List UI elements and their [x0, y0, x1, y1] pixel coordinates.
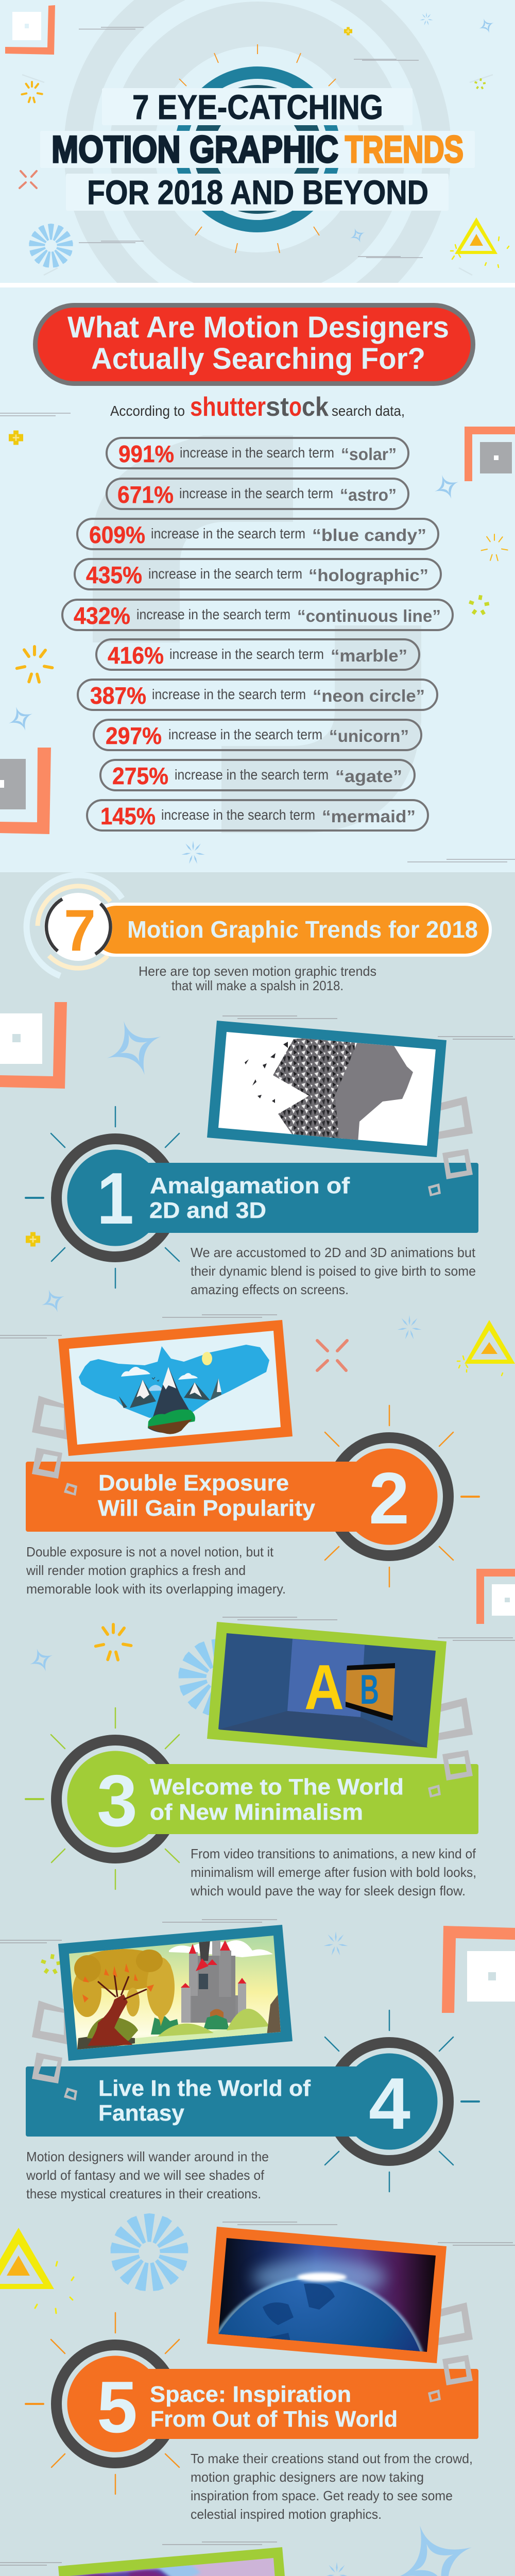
faint large letter backdrop — [93, 435, 421, 833]
search term row: marble: increase in the search term — [169, 646, 324, 662]
decorative lines — [222, 1617, 515, 1640]
icon: blue asterisk — [420, 12, 433, 26]
icon: yellow triangle — [451, 217, 509, 267]
outer light arc — [27, 875, 122, 976]
icon: yellow ticks — [96, 1624, 131, 1660]
grey squares — [32, 1448, 77, 1496]
search term row: neon circle: 387% — [90, 682, 146, 709]
icon: orange frame right — [476, 1569, 515, 1624]
search term row: astro: increase in the search term — [179, 485, 333, 501]
icon: blue star lower — [350, 228, 365, 243]
description: amazing effects on screens. — [191, 1282, 349, 1297]
icon: blue asterisk — [324, 2562, 349, 2576]
description — [26, 1544, 286, 1597]
orange title banner: Motion Graphic Trends for 2018 — [127, 916, 478, 943]
title bar — [26, 2066, 357, 2137]
icon: yellow cross — [344, 27, 352, 35]
cream arcs — [38, 886, 110, 968]
page background: light blue upper section — [0, 0, 515, 872]
description — [190, 1846, 476, 1899]
source line with shutterstock wordmark: o — [289, 392, 302, 422]
search term row: astro: 671% — [117, 481, 174, 508]
number: 3 — [97, 1760, 138, 1842]
big grey square behind photo — [436, 1698, 473, 1740]
description — [26, 2149, 269, 2201]
title bar: Welcome to The World — [150, 1774, 404, 1800]
source line with shutterstock wordmark — [110, 392, 405, 422]
icon: yellow triangle — [457, 1320, 515, 1376]
source line with shutterstock wordmark: search data, — [332, 403, 405, 419]
search term row: continuous line: 432% — [74, 602, 130, 629]
icon: big blue star — [397, 2526, 472, 2576]
source line with shutterstock wordmark: st — [266, 392, 289, 422]
icon: blue sunburst — [110, 2213, 189, 2292]
search term row: unicorn: increase in the search term — [168, 726, 322, 742]
panel: trend 1 — [0, 1002, 515, 1312]
number ring — [57, 1139, 174, 1257]
orange title banner — [88, 903, 492, 957]
search term row: neon circle — [78, 680, 437, 710]
number ring — [331, 2042, 448, 2161]
icon: yellow triangle — [0, 2228, 74, 2313]
icon: grey square and orange frame left — [0, 748, 51, 834]
description: inspiration from space. Get ready to see some — [191, 2488, 453, 2503]
search term row: mermaid — [87, 800, 428, 831]
search term row: unicorn: “unicorn” — [329, 726, 409, 745]
search term row: continuous line: “continuous line” — [297, 606, 441, 625]
page background: grey-blue trends section — [0, 872, 515, 2576]
search term row: blue candy: “blue candy” — [312, 526, 426, 545]
grey squares — [428, 2355, 473, 2402]
search term row: blue candy: 609% — [89, 521, 145, 548]
search term row: mermaid: 145% — [100, 803, 156, 829]
description: will render motion graphics a fresh and — [26, 1563, 246, 1578]
title bar — [26, 1462, 357, 1532]
icon: blue asterisk — [397, 1315, 422, 1340]
description: world of fantasy and we will see shades of — [26, 2167, 265, 2183]
search term row: marble — [96, 639, 419, 670]
numeral badge: 7 — [64, 898, 96, 963]
photo frame: fluid ink — [58, 2547, 293, 2576]
icon: green dots behind photo — [41, 1954, 61, 1974]
title bar — [148, 1163, 478, 1233]
search term row: marble: 416% — [108, 642, 164, 669]
photo frame: minimal AB room: A — [304, 1652, 344, 1723]
panel: trend 5 — [0, 2213, 515, 2522]
icon: blue sunburst behind photo — [178, 1639, 256, 1716]
search term row: holographic: “holographic” — [308, 566, 428, 585]
search term row: holographic: 435% — [86, 562, 142, 588]
icon: orange corner frame — [5, 5, 55, 55]
panel: trend 3 — [26, 1569, 515, 1899]
red heading pill: What Are Motion Designers — [67, 311, 449, 344]
icon: orange frame with white square — [0, 1002, 67, 1089]
search term row: unicorn: 297% — [106, 722, 162, 749]
search term row: marble: “marble” — [331, 646, 407, 665]
title bar: Space: Inspiration — [150, 2382, 351, 2407]
intro paragraph — [139, 963, 376, 993]
title bar: Amalgamation of — [150, 1173, 350, 1198]
title box line 3: FOR 2018 AND BEYOND — [87, 173, 428, 211]
number ring — [331, 1437, 448, 1556]
description: these mystical creatures in their creations. — [26, 2186, 261, 2201]
icon: yellow cross — [26, 1232, 40, 1247]
panel: search data — [0, 305, 515, 864]
red heading pill: Actually Searching For? — [91, 342, 425, 376]
photo frame: minimal AB room: B — [360, 1667, 379, 1713]
icon: blue star lower — [42, 1290, 64, 1312]
search term row: solar: “solar” — [341, 445, 397, 464]
search term row: continuous line: increase in the search term — [136, 606, 290, 622]
icon: blue star — [30, 1649, 53, 1671]
red heading pill — [35, 305, 473, 383]
search term row: mermaid: “mermaid” — [322, 807, 416, 826]
decorative lines — [0, 1315, 277, 1338]
search term row: agate: 275% — [112, 762, 168, 789]
search term row: continuous line — [62, 600, 453, 630]
icon: blue star — [107, 1021, 161, 1075]
decorative lines — [0, 1920, 277, 1943]
rays — [51, 2313, 179, 2494]
search term row: agate: “agate” — [335, 767, 402, 786]
title box line 2: TRENDS — [345, 129, 464, 171]
search term row: unicorn — [94, 720, 421, 750]
big grey square behind photo — [436, 2302, 473, 2345]
description: celestial inspired motion graphics. — [191, 2506, 382, 2522]
title bar: Live In the World of — [98, 2076, 311, 2101]
title bar: Double Exposure — [98, 1470, 289, 1496]
search term row: agate: increase in the search term — [175, 767, 329, 783]
big grey square behind photo — [32, 1396, 70, 1440]
icon: green dots — [474, 78, 486, 89]
icon: green dots — [469, 595, 489, 615]
title bar: Fantasy — [98, 2100, 185, 2126]
search term row: holographic: increase in the search term — [148, 566, 302, 582]
photo frame: fantasy castle — [58, 1925, 293, 2061]
decorative lines — [0, 2542, 277, 2565]
decorative lines — [222, 1016, 515, 1039]
title bar: From Out of This World — [150, 2406, 398, 2432]
icon: blue star — [435, 475, 458, 499]
big grey square behind photo — [32, 2001, 70, 2045]
icon: thin yellow ticks — [482, 534, 508, 561]
photo frame: shattered head — [206, 1021, 448, 1158]
description: their dynamic blend is poised to give birth to some — [191, 1263, 476, 1279]
big grey square behind photo — [436, 1096, 473, 1139]
description: minimalism will emerge after fusion with bold looks, — [191, 1865, 476, 1880]
description: Double exposure is not a novel notion, but it — [26, 1544, 274, 1560]
title bar: of New Minimalism — [150, 1800, 363, 1825]
description: which would pave the way for sleek design flow. — [190, 1883, 466, 1899]
description: motion graphic designers are now taking — [191, 2469, 424, 2485]
icon: blue asterisk — [181, 841, 205, 864]
number ring — [57, 1740, 174, 1858]
icon: white square — [12, 12, 41, 40]
panel: trend 6 — [0, 2526, 479, 2576]
source line with shutterstock wordmark: According to — [110, 403, 185, 419]
grey squares — [428, 1149, 473, 1196]
title box line 1: 7 EYE-CATCHING — [132, 88, 383, 127]
icon: blue star — [479, 19, 493, 33]
description — [191, 2451, 473, 2522]
description — [191, 1245, 476, 1297]
source line with shutterstock wordmark: ck — [302, 392, 329, 422]
description: To make their creations stand out from the crowd, — [191, 2451, 473, 2466]
title bar — [148, 1764, 478, 1834]
search term row: blue candy — [77, 519, 438, 549]
search term row: mermaid: increase in the search term — [161, 807, 315, 823]
search term row: neon circle: increase in the search term — [152, 686, 306, 702]
decorative lines — [222, 2222, 515, 2245]
icon: salmon cross marks — [317, 1341, 347, 1370]
photo frame: eagle double exposure — [58, 1320, 293, 1456]
icon: blue asterisk — [323, 1931, 348, 1956]
search term row: holographic — [75, 559, 441, 589]
icon: yellow ticks left — [17, 647, 52, 682]
decorative grey lines — [79, 27, 423, 258]
decorative lines — [0, 413, 515, 862]
panel: trend 2 — [0, 1315, 515, 1597]
numeral badge — [44, 893, 112, 963]
intro paragraph: Here are top seven motion graphic trends — [139, 963, 376, 979]
number: 2 — [369, 1458, 409, 1539]
number: 1 — [97, 1158, 134, 1240]
concentric ring backdrop — [78, 0, 437, 329]
photo frame: minimal AB room — [207, 1622, 447, 1758]
panel: trend 4 — [0, 1920, 515, 2201]
rays — [51, 1708, 179, 1889]
description: We are accustomed to 2D and 3D animations but — [191, 1245, 476, 1260]
intro paragraph: that will make a spalsh in 2018. — [171, 978, 344, 993]
title box line 2: MOTION GRAPHIC — [52, 129, 338, 171]
search term row: blue candy: increase in the search term — [151, 526, 305, 541]
number ring — [57, 2345, 174, 2463]
description: Motion designers will wander around in the — [26, 2149, 269, 2164]
description: From video transitions to animations, a new kind of — [191, 1846, 476, 1861]
title bar: Will Gain Popularity — [98, 1496, 316, 1521]
number: 4 — [369, 2063, 410, 2145]
source line with shutterstock wordmark: shutter — [190, 392, 266, 422]
title bar: 2D and 3D — [149, 1198, 266, 1223]
grey squares — [32, 2053, 77, 2100]
header panel — [5, 0, 510, 283]
photo frame: space earth — [202, 2227, 447, 2503]
search term row: astro — [107, 479, 408, 509]
icon: yellow ticks — [22, 82, 42, 102]
icon: blue sunburst — [29, 224, 73, 268]
search term row: astro: “astro” — [340, 485, 397, 504]
radial orange ticks — [179, 44, 336, 253]
panel: trends intro banner — [27, 875, 492, 993]
search term row: solar: 991% — [118, 440, 174, 467]
icon: yellow cross — [9, 431, 23, 445]
rays — [325, 1405, 453, 1587]
description: memorable look with its overlapping imagery. — [26, 1581, 286, 1597]
icon: orange frame right — [465, 427, 515, 481]
search term row: solar — [107, 438, 408, 468]
search term row: agate — [100, 760, 415, 790]
rays — [325, 2010, 453, 2192]
search term row: solar: increase in the search term — [180, 445, 334, 461]
rays — [51, 1107, 179, 1288]
search term row: neon circle: “neon circle” — [313, 686, 425, 705]
icon: blue star left — [9, 707, 32, 731]
grey squares — [428, 1750, 473, 1798]
icon: salmon cross marks — [20, 171, 37, 188]
number: 5 — [97, 2366, 138, 2448]
white divider strip — [0, 283, 515, 287]
title bar — [148, 2369, 478, 2439]
icon: orange frame with white square — [442, 1926, 515, 2013]
